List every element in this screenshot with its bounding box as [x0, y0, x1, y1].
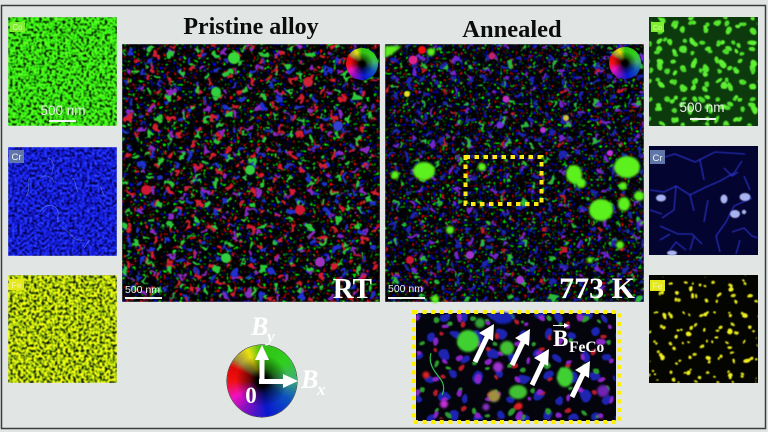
Fe-rich particles	[649, 275, 758, 383]
label: RT: RT	[333, 273, 372, 305]
arrow: magnetisation	[512, 329, 530, 365]
label: B FeCo	[553, 323, 605, 356]
colour wheel: annealed map	[609, 47, 641, 79]
label: By	[250, 312, 275, 346]
grain boundary network	[650, 152, 758, 254]
red and magenta grains	[404, 46, 613, 284]
heading: annealed: Annealed	[462, 16, 562, 43]
scale bar: 500 nm: 500 nm	[388, 283, 423, 295]
inset grains	[422, 312, 609, 410]
arrow: magnetisation	[572, 361, 590, 397]
label: Co: Co	[12, 23, 23, 32]
panel: Fe map annealed	[649, 275, 758, 383]
label: B FeCo: B	[553, 326, 568, 351]
colour wheel: pristine map	[346, 48, 378, 80]
label: zero: 0	[245, 383, 257, 408]
label: By: y	[265, 327, 275, 346]
coloured grains texture	[122, 44, 380, 302]
label: Fe: Fe	[12, 280, 22, 290]
inset texture	[416, 313, 616, 421]
scale bar: 500 nm: 500 nm	[40, 103, 86, 118]
coloured grains texture	[385, 44, 644, 302]
label: Bx: x	[316, 380, 326, 399]
panel: Co map annealed	[649, 17, 758, 126]
large green FeCo precipitates	[385, 46, 644, 303]
label: Bx: B	[300, 365, 318, 394]
label: Bx	[300, 365, 326, 399]
panel: annealed magnetic map	[385, 44, 644, 305]
curved grain boundary	[430, 353, 444, 395]
arrow: By axis	[255, 345, 269, 384]
inset: magnified region	[414, 312, 619, 422]
heading: pristine alloy: Pristine alloy	[183, 14, 319, 40]
Co-rich particles	[649, 17, 758, 126]
label: B FeCo: FeCo	[569, 339, 605, 356]
arrow: magnetisation	[475, 324, 494, 362]
label: Co: Co	[653, 23, 662, 32]
label: Fe: Fe	[653, 281, 663, 291]
yellow dashed selection box	[466, 157, 542, 204]
label: Cr: Cr	[11, 152, 22, 163]
grain boundaries	[26, 158, 105, 248]
panel: Fe map pristine	[8, 275, 117, 383]
label: By: B	[250, 312, 268, 341]
Cr-rich grains	[656, 193, 750, 256]
legend axes and labels	[245, 312, 326, 408]
panel: pristine magnetic map	[122, 44, 380, 305]
panel: Co map pristine	[8, 17, 117, 126]
panel: Cr map pristine	[8, 147, 117, 256]
arrow: Bx axis	[259, 374, 298, 388]
larger grains	[141, 52, 343, 267]
label: 773 K: 773 K	[559, 272, 636, 305]
panel: Cr map annealed	[649, 146, 758, 256]
arrow: magnetisation	[532, 349, 549, 385]
colour wheel legend	[227, 345, 297, 417]
scale bar: 500 nm: 500 nm	[679, 100, 725, 115]
label: Cr: Cr	[652, 153, 663, 164]
scale bar: 500 nm: 500 nm	[125, 284, 160, 296]
yellow dotted inset border	[414, 312, 619, 422]
